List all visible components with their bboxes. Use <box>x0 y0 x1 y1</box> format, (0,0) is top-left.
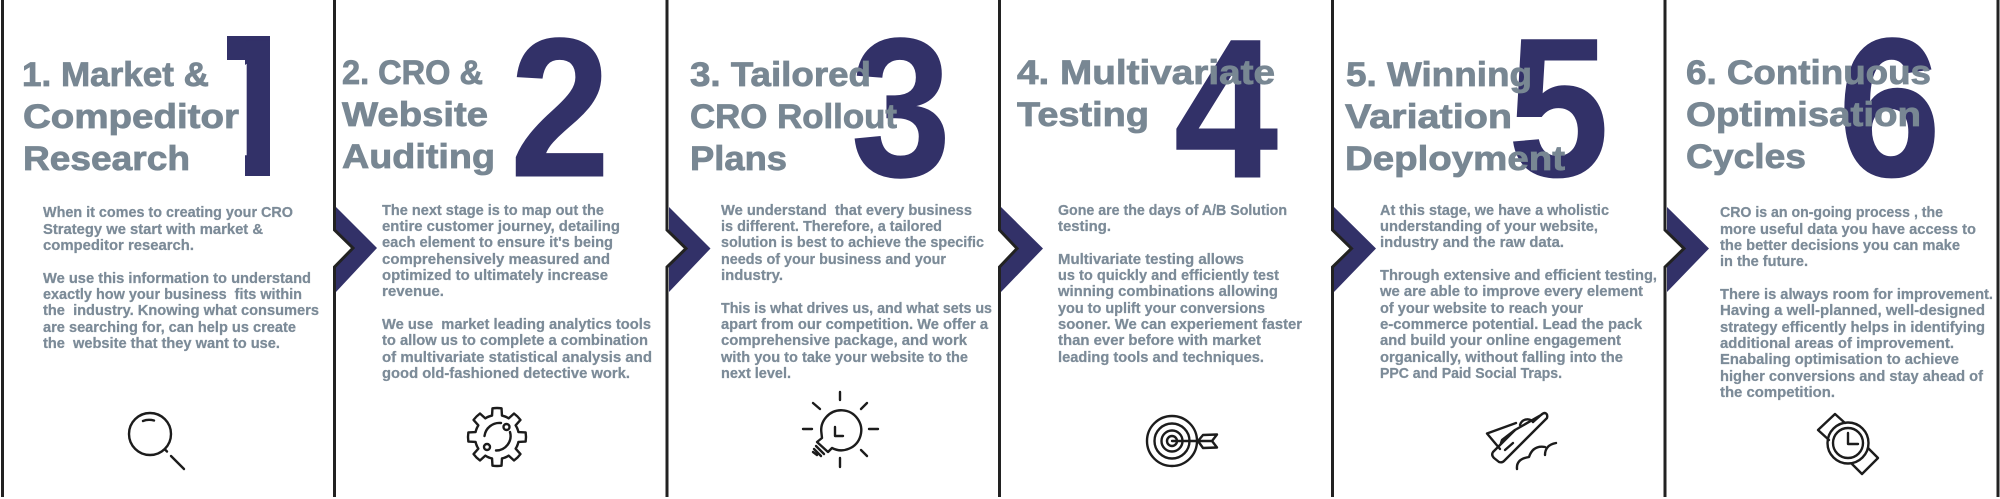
body text 2 <box>382 202 652 382</box>
heading 5 <box>1345 56 1566 178</box>
panel 4: multivariate testing <box>1000 0 1302 497</box>
body text 4: leading tools and techniques. <box>1058 349 1264 366</box>
body text 4: winning combinations allowing <box>1057 283 1278 300</box>
body text 4 <box>1057 202 1302 366</box>
body text 5: and build your online engagement <box>1380 332 1621 349</box>
panel 2: CRO and website auditing <box>334 0 652 497</box>
body text 2: We use market leading analytics tools <box>382 316 651 333</box>
body text 3: with you to take your website to the <box>720 349 968 366</box>
panel 6: continuous optimisation cycles <box>1665 0 1998 497</box>
body text 4: testing. <box>1058 218 1111 235</box>
body text 1: When it comes to creating your CRO <box>43 204 293 221</box>
big numeral 2: 2 <box>510 0 610 218</box>
heading 6: 6. Continuous <box>1686 54 1931 92</box>
divider with chevron 6 <box>1665 0 1709 497</box>
heading 4 <box>1017 54 1275 134</box>
body text 1 <box>43 204 319 352</box>
body text 5: understanding of your website, <box>1380 218 1598 235</box>
body text 6: strategy efficently helps in identifying <box>1720 319 1985 336</box>
heading 1: Research <box>23 140 190 178</box>
body text 6: more useful data you have access to <box>1720 221 1976 238</box>
heading 2 <box>342 54 495 176</box>
icon: target with arrow <box>1147 416 1217 466</box>
body text 3: needs of your business and your <box>721 251 946 268</box>
heading 3 <box>690 56 898 178</box>
heading 1 <box>22 56 239 178</box>
body text 1: the industry. Knowing what consumers <box>43 302 319 319</box>
heading 5: 5. Winning <box>1346 56 1532 94</box>
heading 1: Compeditor <box>23 98 239 136</box>
body text 5: PPC and Paid Social Traps. <box>1380 365 1562 382</box>
body text 1: We use this information to understand <box>43 270 311 287</box>
body text 3: industry. <box>721 267 783 284</box>
divider with chevron 5 <box>1332 0 1376 497</box>
body text 4: us to quickly and efficiently test <box>1058 267 1279 284</box>
body text 3: solution is best to achieve the specific <box>721 234 984 251</box>
body text 1: the website that they want to use. <box>43 335 280 352</box>
body text 3 <box>720 202 992 382</box>
divider line right <box>1996 0 2000 497</box>
body text 3: This is what drives us, and what sets us <box>721 300 992 317</box>
heading 2: 2. CRO & <box>342 54 483 92</box>
divider with chevron 2 <box>334 0 377 497</box>
icon: gear <box>468 408 526 466</box>
big numeral 6: 6 <box>1838 0 1941 218</box>
body text 5: we are able to improve every element <box>1379 283 1643 300</box>
body text 3: comprehensive package, and work <box>721 332 968 349</box>
heading 4: Testing <box>1017 96 1149 134</box>
heading 6 <box>1686 54 1931 176</box>
body text 2: of multivariate statistical analysis and <box>382 349 652 366</box>
panel 5: winning variation deployment <box>1332 0 1657 497</box>
heading 6: Cycles <box>1686 138 1806 176</box>
body text 2: optimized to ultimately increase <box>382 267 608 284</box>
big numeral 4: 4 <box>1174 0 1278 219</box>
body text 6: Enabaling optimisation to achieve <box>1720 351 1959 368</box>
body text 4: sooner. We can experiement faster <box>1058 316 1302 333</box>
body text 2: The next stage is to map out the <box>382 202 604 219</box>
body text 5: industry and the raw data. <box>1380 234 1564 251</box>
body text 4: Multivariate testing allows <box>1058 251 1244 268</box>
body text 2: revenue. <box>382 283 444 300</box>
body text 5 <box>1379 202 1657 382</box>
body text 3: apart from our competition. We offer a <box>721 316 989 333</box>
icon: wrist watch <box>1818 414 1878 474</box>
body text 2: entire customer journey, detailing <box>382 218 620 235</box>
icon: light bulb with clock <box>803 392 878 467</box>
big numeral 1 <box>227 36 270 176</box>
heading 4: 4. Multivariate <box>1017 54 1275 92</box>
body text 2: comprehensively measured and <box>382 251 610 268</box>
big numeral 5: 5 <box>1508 0 1609 218</box>
big numeral 1: 1 <box>206 0 304 218</box>
heading 3: 3. Tailored <box>690 56 871 94</box>
divider line left <box>1 0 4 497</box>
heading 6: Optimisation <box>1686 96 1921 134</box>
body text 2: each element to ensure it's being <box>382 234 613 251</box>
icon: flying superhero over clouds <box>1487 413 1556 469</box>
body text 6: in the future. <box>1720 253 1808 270</box>
body text 1: exactly how your business fits within <box>43 286 302 303</box>
body text 5: Through extensive and efficient testing, <box>1380 267 1657 284</box>
body text 5: e-commerce potential. Lead the pack <box>1380 316 1643 333</box>
body text 6: There is always room for improvement. <box>1720 286 1993 303</box>
heading 3: CRO Rollout <box>690 98 898 136</box>
body text 4: Gone are the days of A/B Solution <box>1058 202 1287 219</box>
body text 3: next level. <box>721 365 791 382</box>
body text 3: is different. Therefore, a tailored <box>721 218 942 235</box>
body text 1: compeditor research. <box>43 237 194 254</box>
panel 3: tailored CRO rollout plans <box>667 0 992 497</box>
body text 6 <box>1720 204 1993 401</box>
divider with chevron 4 <box>1000 0 1043 497</box>
body text 2: to allow us to complete a combination <box>382 332 648 349</box>
body text 6: additional areas of improvement. <box>1720 335 1954 352</box>
body text 6: the competition. <box>1720 384 1835 401</box>
body text 4: than ever before with market <box>1058 332 1261 349</box>
body text 5: organically, without falling into the <box>1380 349 1623 366</box>
divider with chevron 3 <box>667 0 710 497</box>
heading 5: Deployment <box>1345 140 1566 178</box>
body text 4: you to uplift your conversions <box>1058 300 1265 317</box>
body text 6: the better decisions you can make <box>1720 237 1960 254</box>
body text 3: We understand that every business <box>721 202 972 219</box>
heading 3: Plans <box>690 140 787 178</box>
body text 6: Having a well-planned, well-designed <box>1720 302 1985 319</box>
heading 2: Auditing <box>342 138 495 176</box>
body text 6: CRO is an on-going process , the <box>1720 204 1943 221</box>
heading 5: Variation <box>1345 98 1512 136</box>
body text 6: higher conversions and stay ahead of <box>1720 368 1984 385</box>
body text 2: good old-fashioned detective work. <box>382 365 630 382</box>
big numeral 3: 3 <box>851 0 951 218</box>
icon: magnifying glass <box>129 413 184 469</box>
heading 1: 1. Market & <box>22 56 209 94</box>
body text 5: of your website to reach your <box>1380 300 1583 317</box>
body text 1: are searching for, can help us create <box>43 319 296 336</box>
panel 1: market and compeditor research <box>2 0 319 497</box>
body text 1: Strategy we start with market & <box>43 221 263 238</box>
body text 5: At this stage, we have a wholistic <box>1380 202 1609 219</box>
heading 2: Website <box>342 96 488 134</box>
